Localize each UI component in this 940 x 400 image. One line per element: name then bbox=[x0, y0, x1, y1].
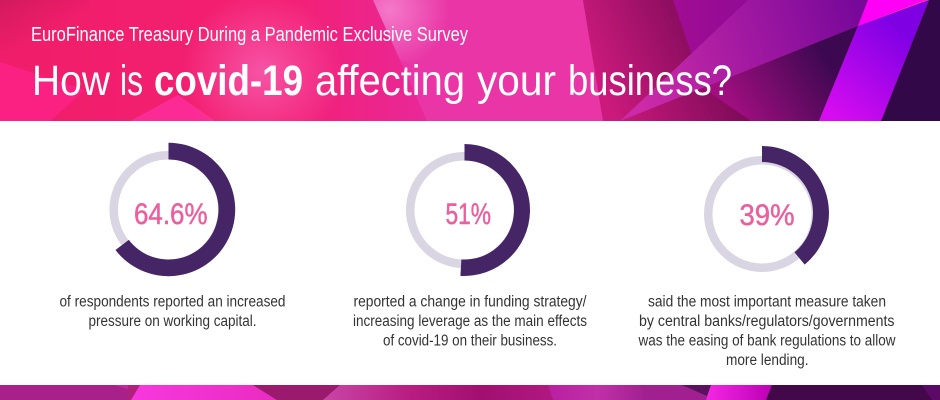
caption: funding strategy: increasing leverage as the main effects bbox=[353, 313, 587, 330]
caption: funding strategy: of covid-19 on their business. bbox=[383, 332, 557, 350]
footer banner bbox=[0, 385, 940, 400]
title: How bbox=[32, 57, 111, 105]
title: covid-19 bbox=[154, 57, 303, 105]
caption: bank regulations: was the easing of bank regulations to allow bbox=[638, 332, 896, 350]
title bbox=[32, 57, 732, 105]
title: is bbox=[120, 57, 143, 105]
caption: working capital: pressure on working capital. bbox=[88, 313, 256, 330]
header banner background bbox=[0, 0, 940, 121]
donut chart: 64.6%: 64.6% bbox=[134, 198, 208, 231]
donut chart: 39%: 39% bbox=[740, 199, 794, 232]
caption: funding strategy bbox=[353, 294, 587, 350]
title: affecting bbox=[315, 57, 465, 105]
caption: working capital: of respondents reported an increased bbox=[60, 294, 286, 310]
caption: bank regulations: more lending. bbox=[726, 352, 808, 369]
title: your bbox=[477, 57, 556, 105]
caption: bank regulations bbox=[638, 294, 896, 369]
title: business? bbox=[568, 57, 732, 105]
caption: bank regulations: said the most important measure taken bbox=[648, 294, 886, 310]
donut chart: 51% bbox=[410, 144, 530, 276]
donut chart: 39% bbox=[708, 146, 829, 268]
caption: working capital bbox=[60, 294, 286, 330]
subtitle: EuroFinance Treasury During a Pandemic Exclusive Survey bbox=[31, 24, 468, 46]
donut chart: 51%: 51% bbox=[446, 198, 491, 231]
donut chart: 64.6% bbox=[114, 143, 235, 276]
caption: funding strategy: reported a change in funding strategy/ bbox=[354, 294, 587, 310]
caption: bank regulations: by central banks/regulators/governments bbox=[639, 313, 895, 330]
